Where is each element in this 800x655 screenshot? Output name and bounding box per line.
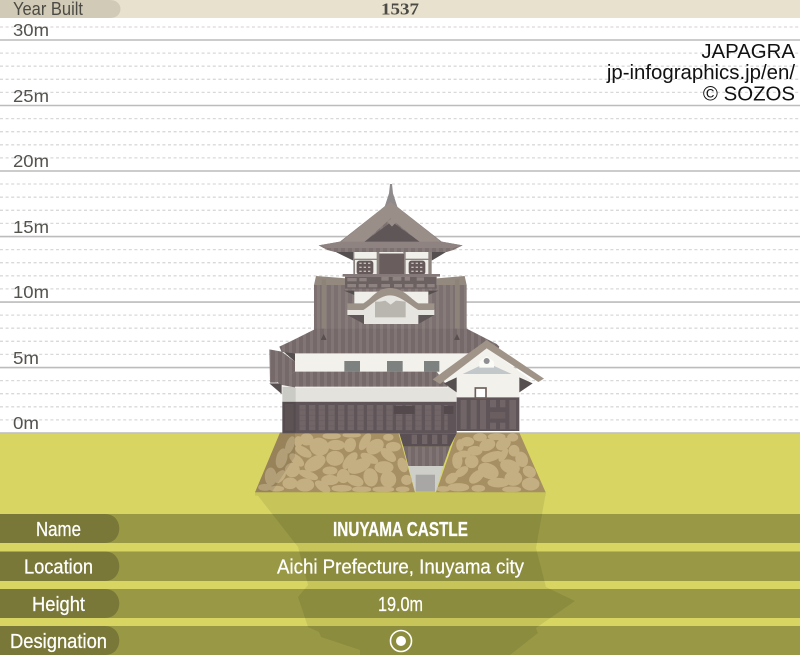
height axis labels: 25m — [13, 86, 49, 106]
credit text: jp-infographics.jp/en/ — [606, 62, 795, 84]
header bar: year built: 1537 — [381, 0, 420, 18]
height axis labels: 10m — [13, 282, 49, 302]
info table text: INUYAMA CASTLE — [333, 519, 468, 541]
credit text: JAPAGRA — [701, 41, 795, 63]
castle gate passage — [399, 433, 457, 492]
credit text — [606, 41, 795, 106]
castle upper tower — [314, 184, 467, 341]
castle lower wall — [282, 387, 457, 433]
castle illustration — [255, 184, 546, 496]
height axis labels: 15m — [13, 217, 49, 237]
castle shadow — [255, 492, 575, 655]
credit text: © SOZOS — [703, 84, 795, 106]
info table text: Aichi Prefecture, Inuyama city — [277, 556, 524, 578]
header bar: year built — [0, 0, 800, 19]
height axis labels: 0m — [13, 413, 39, 433]
height axis labels — [13, 20, 49, 433]
info table text: Name — [36, 519, 81, 541]
castle stone base — [255, 432, 546, 496]
info table text: Location — [24, 556, 93, 578]
annex building — [433, 340, 544, 431]
info table background rows — [0, 514, 800, 655]
height axis labels: 20m — [13, 151, 49, 171]
castle middle wall and roofs — [269, 329, 499, 394]
info table text: Designation — [10, 631, 107, 653]
info table text: 19.0m — [378, 594, 423, 616]
info table text: Height — [32, 594, 85, 616]
ground — [0, 434, 800, 655]
height axis labels: 30m — [13, 20, 49, 40]
designation icon — [390, 630, 412, 652]
info table labels — [0, 514, 119, 655]
info table text — [10, 519, 524, 653]
height axis labels: 5m — [13, 348, 39, 368]
